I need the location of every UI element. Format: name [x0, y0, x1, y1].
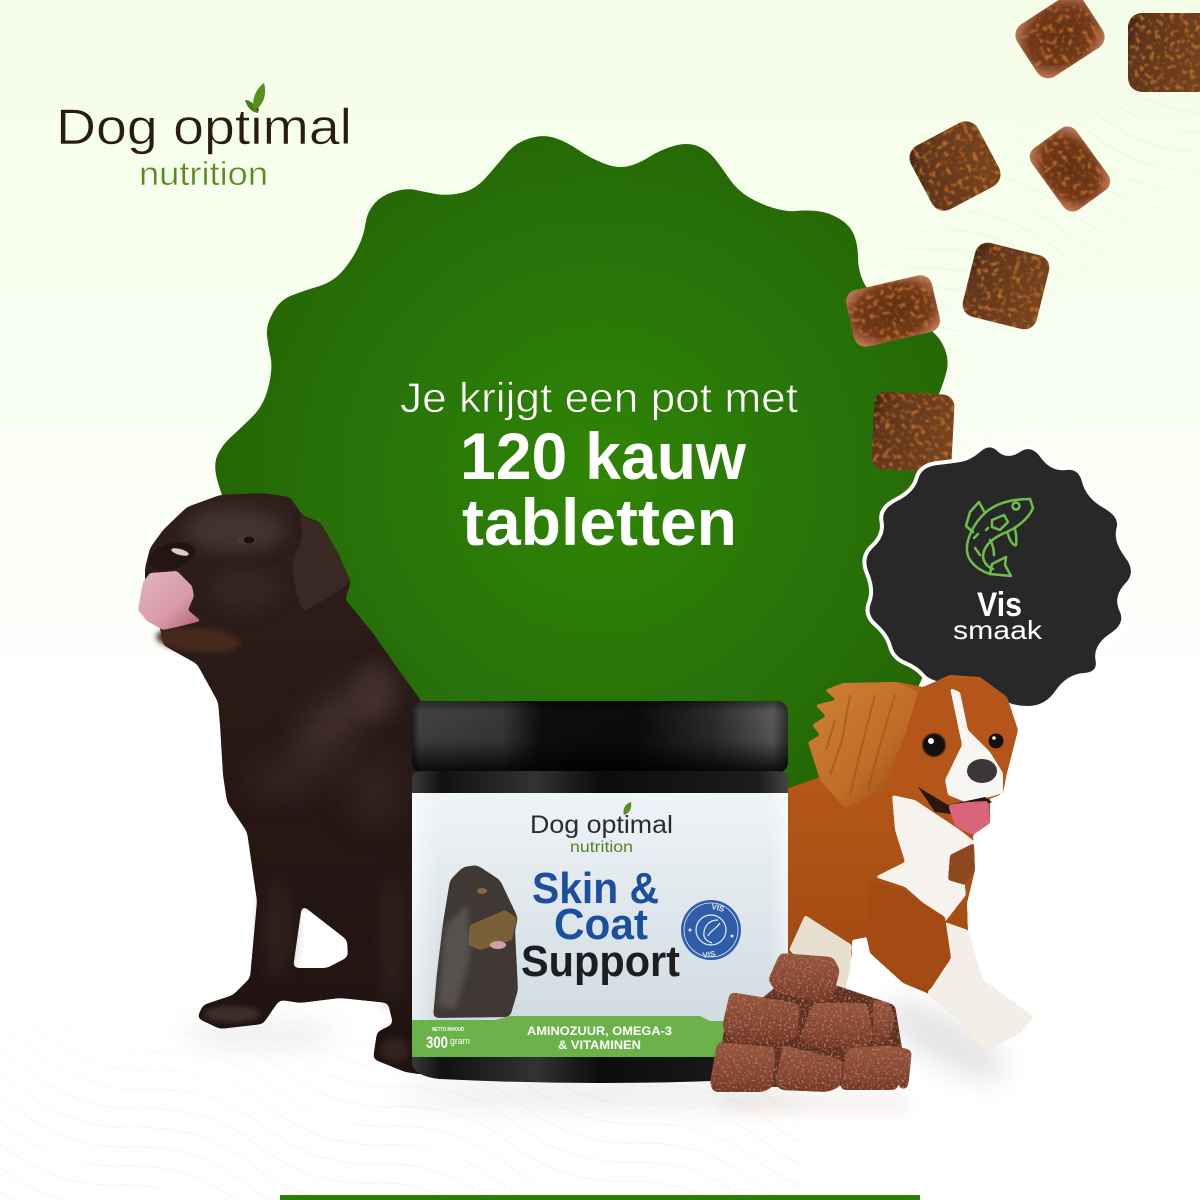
product title: Coat: [554, 900, 648, 949]
logo: Dog optimal nutrition: [56, 83, 352, 192]
green scalloped panel: [215, 136, 951, 880]
jar logo: nutrition: [570, 839, 633, 856]
labrador ear: [292, 498, 351, 612]
labrador fur highlights: [185, 508, 409, 1062]
net content: 300 gram: [426, 1027, 470, 1052]
headline: Je krijgt een pot met 120 kauw tabletten: 120 kauw: [460, 419, 747, 493]
fish flavour badge: [864, 445, 1133, 708]
puppy body: [775, 675, 1033, 1052]
pile of chew tablets: [710, 953, 912, 1092]
labrador lower jaw: [155, 624, 241, 656]
puppy nose: [967, 759, 997, 783]
cavalier spaniel puppy: [775, 675, 1033, 1052]
jar logo: Dog optimal: [530, 811, 673, 839]
jar label: [412, 793, 788, 1057]
labrador nose: [145, 537, 199, 575]
puppy ear with feathered fur: [808, 682, 918, 808]
product title: Support: [521, 937, 680, 986]
ingredients line: & VITAMINEN: [558, 1038, 641, 1052]
puppy tongue: [948, 801, 990, 835]
ingredients line: [527, 1024, 672, 1052]
headline: Je krijgt een pot met 120 kauw tabletten: Je krijgt een pot met: [400, 374, 798, 421]
puppy chest and paw white fur: [789, 795, 1033, 1052]
headline: Je krijgt een pot met 120 kauw tabletten: tabletten: [462, 485, 737, 559]
net content: 300 gram: NETTO INHOUD: [432, 1027, 464, 1033]
spaniel on label: [433, 865, 518, 1018]
product title: [521, 864, 680, 986]
fish seal on label: [681, 900, 741, 960]
badge text: Vis smaak: smaak: [953, 615, 1043, 645]
puppy mouth: [918, 787, 992, 815]
net content: 300 gram: 300: [426, 1033, 448, 1052]
jar logo: [530, 802, 673, 856]
logo: Dog optimal nutrition: nutrition: [139, 155, 268, 192]
badge text: Vis smaak: Vis: [977, 586, 1022, 624]
logo: Dog optimal nutrition: Dog optimal: [56, 99, 352, 155]
labrador tongue: [138, 571, 201, 630]
fish seal on label: VIS: [702, 949, 717, 960]
puppy shoulder and front leg: [865, 843, 975, 990]
chocolate labrador licking its nose: [138, 493, 425, 1075]
puppy white blaze and muzzle: [945, 688, 1003, 802]
product title: Skin &: [532, 864, 659, 913]
labrador eye: [238, 536, 256, 544]
bottom green bar: [280, 1195, 920, 1200]
puppy head: [890, 677, 1018, 810]
jar base: [412, 1050, 788, 1083]
product jar: [412, 701, 788, 1083]
green band: [412, 1016, 788, 1057]
ingredients line: AMINOZUUR, OMEGA-3: [527, 1024, 672, 1038]
falling chews: [844, 0, 1200, 473]
jar neck: [412, 771, 788, 796]
net content: 300 gram: gram: [450, 1036, 470, 1046]
jar lid: [412, 701, 788, 773]
badge text: Vis smaak: [953, 586, 1043, 645]
fish seal on label: VIS: [711, 902, 726, 914]
icon: jumping fish: [966, 499, 1033, 576]
puppy eyes: [922, 734, 1004, 756]
headline: Je krijgt een pot met 120 kauw tabletten: [400, 374, 798, 559]
soft floor shadows: [180, 984, 1018, 1112]
